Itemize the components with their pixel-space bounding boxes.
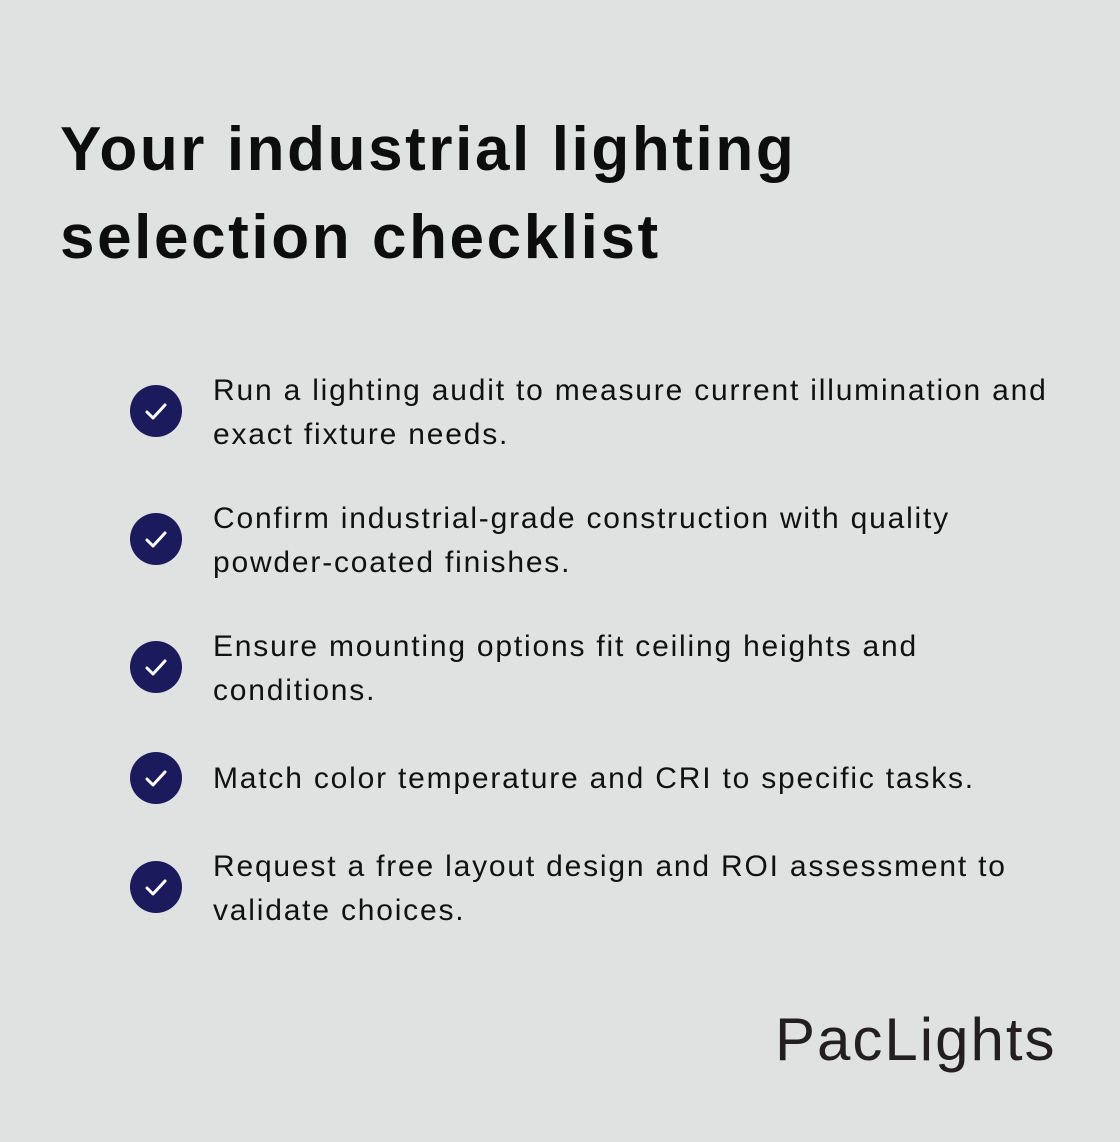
text [213,630,918,707]
text: conditions. [213,674,376,707]
text: Confirm industrial-grade construction with quality [213,502,950,535]
item 5 [130,850,1007,927]
text: Ensure mounting options fit ceiling heights and [213,630,918,663]
text: Request a free layout design and ROI assessment to [213,850,1007,883]
text [213,502,950,579]
icon: check [130,752,182,804]
text [213,374,1048,451]
icon: check [130,385,182,437]
item 2 [130,502,950,579]
text [213,850,1007,927]
text: exact fixture needs. [213,418,509,451]
logo: PacLights [775,1006,1056,1073]
text: Match color temperature and CRI to specific tasks. [213,762,975,795]
title: selection checklist [60,203,661,272]
text: validate choices. [213,894,465,927]
title [60,115,796,272]
text: Run a lighting audit to measure current illumination and [213,374,1048,407]
icon: check [130,513,182,565]
icon: check [130,641,182,693]
item 3 [130,630,918,707]
title: Your industrial lighting [60,115,796,184]
icon: check [130,861,182,913]
item 1 [130,374,1048,451]
item 4 [130,752,975,804]
text: powder-coated finishes. [213,546,571,579]
